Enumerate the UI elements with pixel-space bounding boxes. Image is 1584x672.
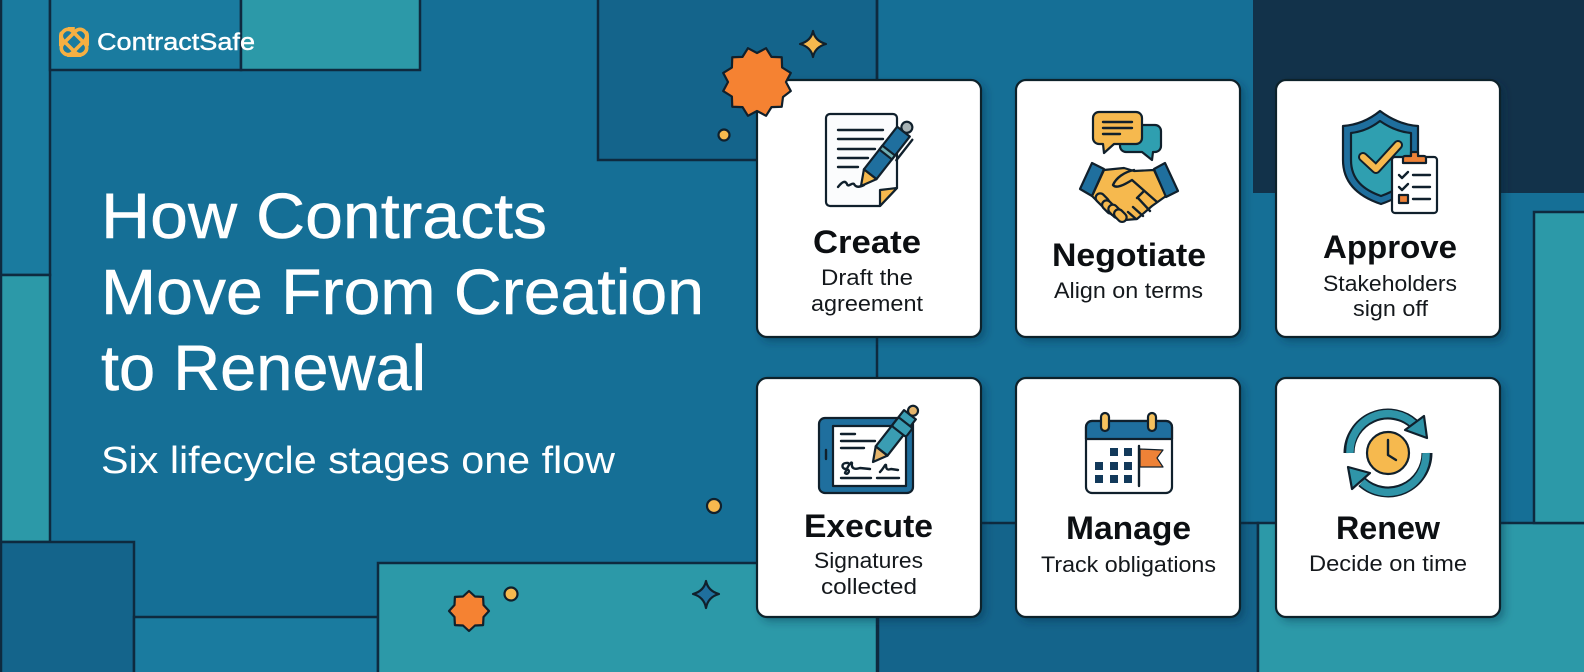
panel: Approve (1276, 80, 1500, 337)
card background (1016, 80, 1240, 337)
card background (757, 80, 981, 337)
heading: Renew (1336, 510, 1440, 546)
icon: handshake and speech bubbles (1080, 112, 1178, 224)
description: collected (821, 574, 917, 599)
icon: calendar with flag (1086, 413, 1172, 493)
decoration: small orange burst (449, 591, 489, 631)
card background (1276, 80, 1500, 337)
description: Draft the (821, 265, 913, 290)
card background (757, 378, 981, 617)
icon: tablet signature (819, 402, 924, 493)
panel: Execute (757, 378, 981, 617)
description: Stakeholders (1323, 271, 1457, 296)
description: Signatures (814, 548, 923, 573)
description: Align on terms (1054, 278, 1203, 303)
subtitle: Six lifecycle stages one flow (101, 440, 616, 482)
icon: shield and checklist (1343, 111, 1437, 213)
icon: logo mark (59, 27, 89, 57)
panel: Manage (1016, 378, 1240, 617)
decoration: blue sparkle (693, 581, 719, 608)
card background (1276, 378, 1500, 617)
description: Track obligations (1041, 552, 1216, 577)
icon: renewal arrows and clock (1348, 414, 1427, 492)
decoration: yellow dot bottom (504, 588, 518, 600)
title: How Contracts (101, 180, 547, 252)
heading: Manage (1066, 510, 1191, 546)
decoration: yellow sparkle (800, 31, 826, 57)
logo (59, 27, 255, 57)
heading: Negotiate (1052, 237, 1206, 273)
card background (1016, 378, 1240, 617)
description: agreement (811, 291, 923, 316)
description: Decide on time (1309, 551, 1467, 576)
logo wordmark: ContractSafe (97, 29, 255, 56)
title: to Renewal (101, 332, 426, 404)
panel: Create (757, 80, 981, 337)
decoration: yellow dot top (718, 130, 730, 140)
heading: Approve (1323, 229, 1457, 265)
heading: Create (813, 224, 921, 260)
description: sign off (1353, 296, 1429, 321)
title (101, 180, 704, 404)
decoration: large orange burst (714, 39, 800, 125)
title: Move From Creation (101, 256, 704, 328)
panel: Renew (1276, 378, 1500, 617)
panel: Negotiate (1016, 80, 1240, 337)
decoration: yellow dot middle (707, 499, 721, 513)
icon: document and pen (826, 114, 920, 206)
heading: Execute (804, 508, 933, 544)
